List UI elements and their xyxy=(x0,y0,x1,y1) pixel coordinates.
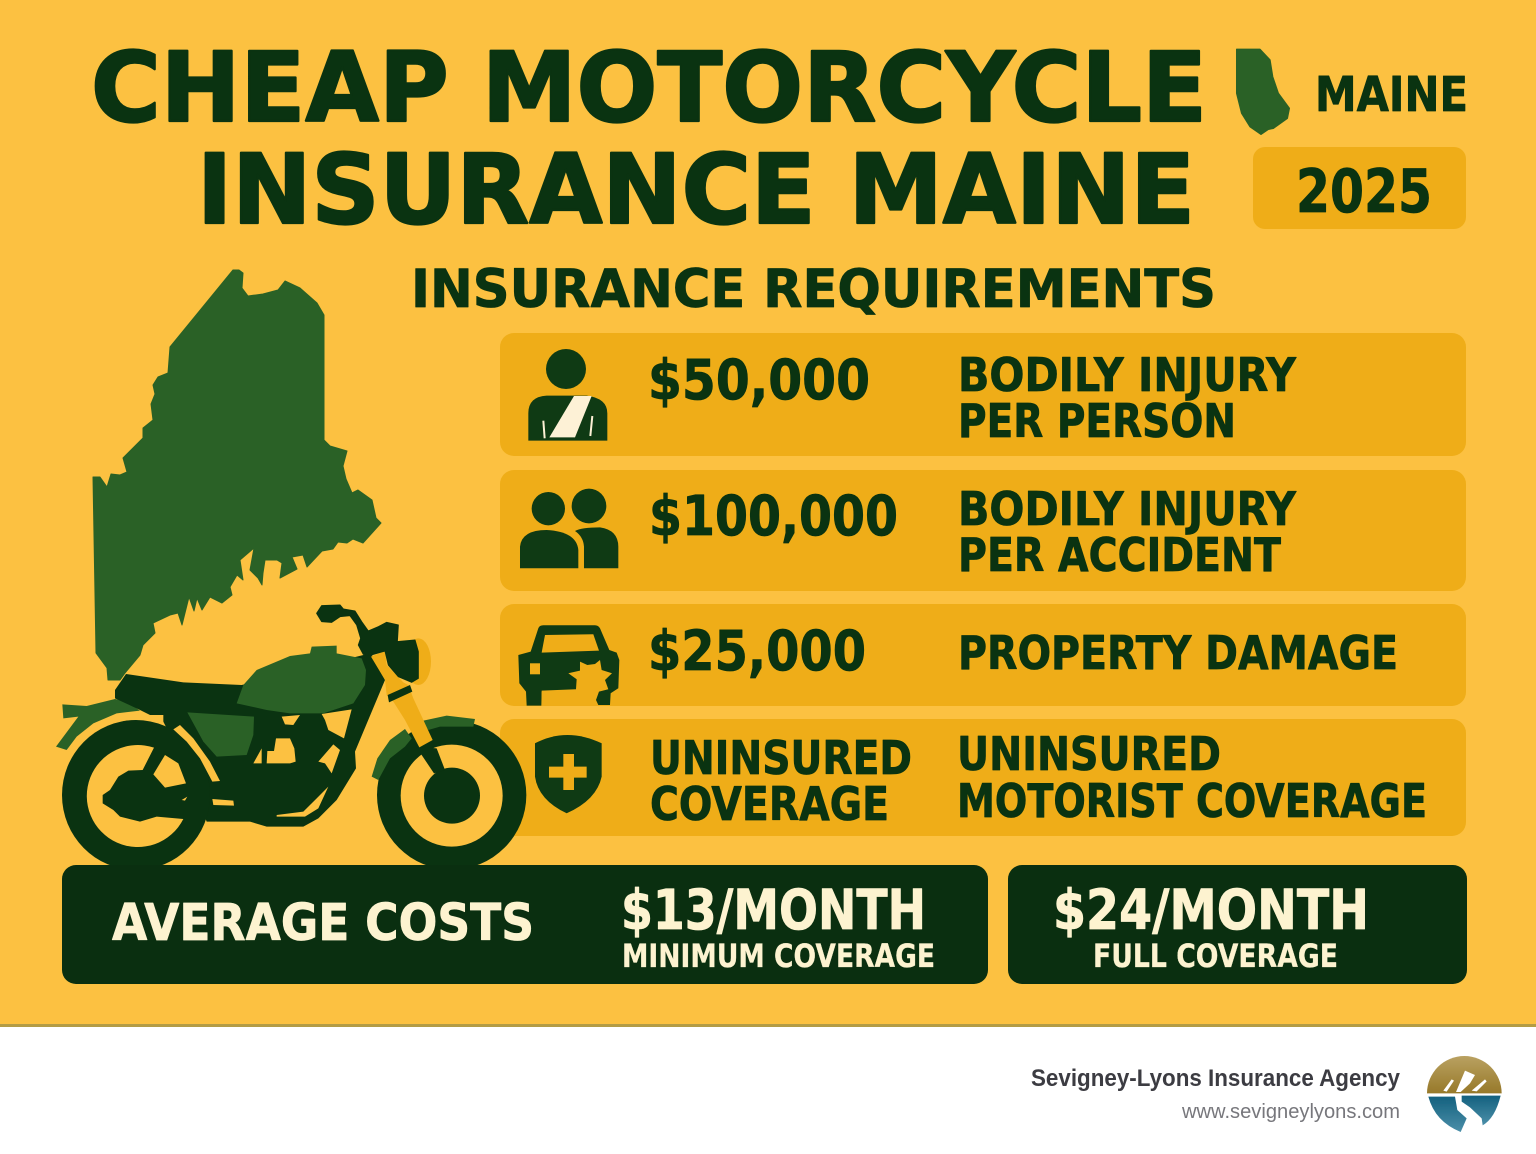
panel: average costs minimum xyxy=(62,865,988,984)
front wheel xyxy=(377,720,526,870)
fuel tank xyxy=(237,646,366,713)
rear wheel wedge opening xyxy=(153,755,186,788)
description: PER ACCIDENT xyxy=(958,528,1282,582)
handlebar and headlight xyxy=(317,605,418,682)
label xyxy=(650,731,912,831)
frame cutouts xyxy=(67,709,352,817)
amount: $50,000 xyxy=(648,348,870,412)
description: UNINSURED xyxy=(957,727,1221,781)
icon: shield with cross xyxy=(535,735,602,813)
description: MOTORIST COVERAGE xyxy=(957,774,1427,828)
footer: agency name: Sevigney-Lyons Insurance Agency xyxy=(1031,1065,1401,1092)
frame and engine xyxy=(115,653,385,827)
footer: website: www.sevigneylyons.com xyxy=(1181,1101,1400,1123)
caption: MINIMUM COVERAGE xyxy=(622,937,935,975)
description: BODILY INJURY xyxy=(958,348,1297,402)
panel: full coverage xyxy=(1008,865,1467,984)
rear wheel xyxy=(62,720,210,870)
description xyxy=(958,482,1297,582)
heading: AVERAGE COSTS xyxy=(112,894,534,953)
panel: uninsured motorist coverage xyxy=(500,719,1466,836)
description xyxy=(958,348,1297,448)
description: BODILY INJURY xyxy=(958,482,1297,536)
front fork lower xyxy=(418,747,445,773)
title xyxy=(91,32,1207,246)
caption: FULL COVERAGE xyxy=(1093,937,1338,975)
panel: bodily injury per accident xyxy=(500,470,1466,591)
description xyxy=(957,727,1427,828)
fork xyxy=(371,651,433,747)
year badge: 2025 xyxy=(1296,157,1432,227)
description: PER PERSON xyxy=(958,394,1236,448)
title: INSURANCE MAINE xyxy=(197,134,1195,246)
bracket xyxy=(388,685,412,702)
panel: property damage xyxy=(500,604,1466,706)
icon: two people xyxy=(520,489,618,568)
icon: small Maine silhouette xyxy=(1237,49,1289,134)
rear fender xyxy=(56,699,140,750)
illustration: motorcycle xyxy=(56,605,526,870)
front fender xyxy=(372,716,475,780)
heading: insurance requirements: INSURANCE REQUIREMENTS xyxy=(411,259,1216,320)
rear wheel ring opening xyxy=(87,745,183,847)
label: Maine: MAINE xyxy=(1315,67,1468,123)
icon: agency logo xyxy=(1427,1056,1502,1132)
price: $13/MONTH xyxy=(621,878,926,942)
map: Maine silhouette xyxy=(93,270,381,680)
amount: $100,000 xyxy=(649,484,898,548)
amount: $25,000 xyxy=(648,619,866,683)
icon: injured person xyxy=(528,349,607,441)
title: CHEAP MOTORCYCLE xyxy=(91,32,1207,144)
headlight halo xyxy=(406,638,431,685)
price: $24/MONTH xyxy=(1053,878,1369,942)
label: UNINSURED xyxy=(650,731,912,785)
icon: damaged car xyxy=(518,625,619,706)
side panel xyxy=(187,712,254,757)
description: PROPERTY DAMAGE xyxy=(958,626,1398,680)
year badge xyxy=(1253,147,1466,229)
label: COVERAGE xyxy=(650,777,889,831)
panel: bodily injury per person xyxy=(500,333,1466,456)
